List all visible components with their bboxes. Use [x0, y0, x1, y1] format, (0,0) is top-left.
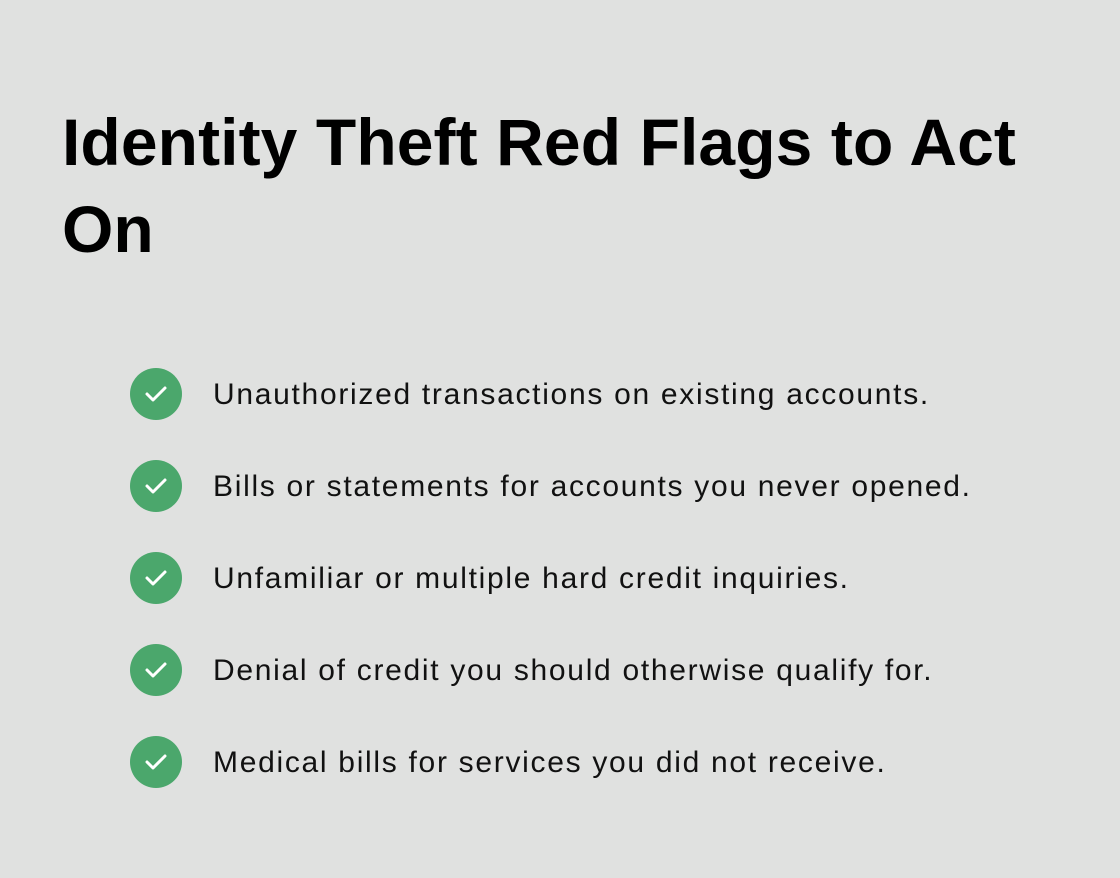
title: On	[62, 192, 154, 266]
list item 3	[130, 552, 850, 604]
icon: check	[130, 552, 182, 604]
icon: check	[130, 736, 182, 788]
list item 2	[130, 460, 972, 512]
list item 5	[130, 736, 886, 788]
list item 1	[130, 368, 930, 420]
icon: check	[130, 368, 182, 420]
icon: check	[130, 644, 182, 696]
title	[62, 105, 1016, 266]
text: Bills or statements for accounts you never opened.	[213, 470, 972, 503]
text: Denial of credit you should otherwise qualify for.	[213, 654, 933, 687]
text: Medical bills for services you did not receive.	[213, 746, 886, 779]
icon: check	[130, 460, 182, 512]
text: Unfamiliar or multiple hard credit inquiries.	[213, 562, 850, 595]
list item 4	[130, 644, 933, 696]
title: Identity Theft Red Flags to Act	[62, 105, 1016, 179]
text: Unauthorized transactions on existing accounts.	[213, 378, 930, 411]
